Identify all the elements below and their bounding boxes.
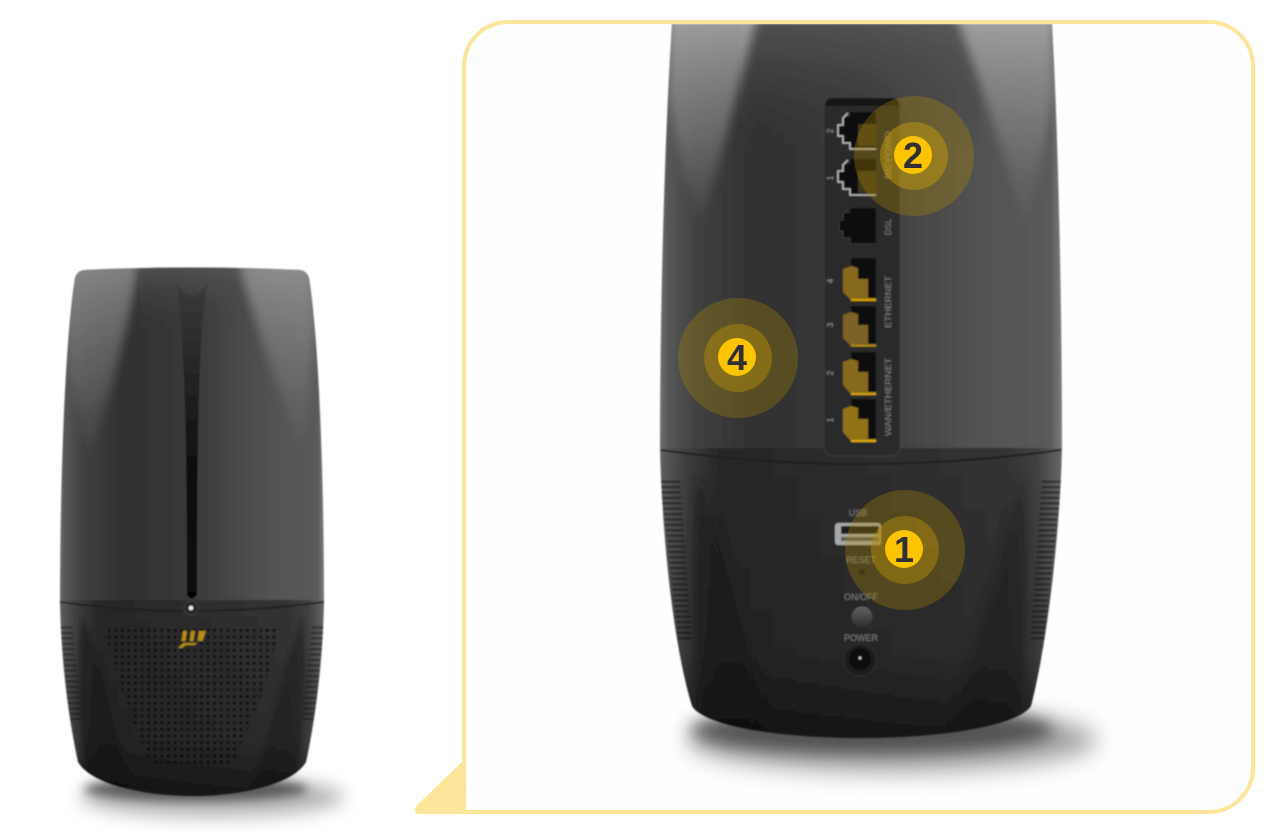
router: front view [56, 262, 328, 800]
marker 2 [854, 96, 974, 216]
port: ethernet 4 [843, 258, 876, 302]
callout pointer [415, 760, 466, 814]
marker 4 [678, 298, 798, 418]
port labels: WAN/ETHERNET [883, 358, 893, 436]
port numbers: 4 [826, 278, 835, 283]
marker 1: 1 [894, 529, 914, 570]
control labels: RESET [846, 555, 877, 565]
on/off button [852, 606, 872, 628]
router: rear view [655, 14, 1067, 745]
front seam [60, 602, 324, 611]
port: white 2 [838, 112, 876, 150]
port numbers: 1 [826, 417, 835, 422]
power socket [844, 644, 876, 676]
port: white 1 [838, 159, 876, 196]
port numbers: 3 [826, 322, 835, 327]
front base [56, 598, 328, 800]
port panel [824, 98, 900, 456]
control labels [844, 508, 878, 643]
reset button [859, 569, 865, 575]
port: ethernet 2 [843, 352, 876, 395]
control labels: POWER [844, 633, 878, 643]
marker 2: 2 [903, 135, 923, 176]
port: ethernet 1 [843, 399, 876, 442]
status LED [184, 601, 198, 615]
port numbers [826, 128, 835, 422]
panel outline with pointer [415, 22, 1253, 814]
panel: rear view callout background [464, 22, 1253, 812]
front upper body [56, 262, 328, 612]
USB port [835, 523, 881, 545]
port: ethernet 3 [843, 306, 876, 347]
brand logo [178, 631, 206, 648]
port labels [883, 131, 893, 436]
light slot [177, 283, 207, 598]
control labels: USB [849, 508, 867, 518]
port numbers: 2 [826, 128, 835, 133]
router base [655, 445, 1067, 745]
router shadow: rear view [687, 706, 1097, 772]
rear controls [835, 508, 881, 676]
marker 4: 4 [727, 337, 747, 378]
router upper body [659, 24, 1063, 450]
control labels: ON/OFF [844, 592, 878, 602]
speaker grille [103, 628, 280, 766]
port: DSL [838, 208, 876, 245]
marker 1 [845, 490, 965, 610]
port labels: BEYOND [883, 131, 893, 179]
port labels: DSL [883, 218, 893, 235]
router shadow: front view [80, 777, 344, 817]
port numbers: 1 [826, 175, 835, 180]
port labels: ETHERNET [883, 276, 893, 328]
port numbers: 2 [826, 370, 835, 375]
seam line [661, 450, 1061, 464]
